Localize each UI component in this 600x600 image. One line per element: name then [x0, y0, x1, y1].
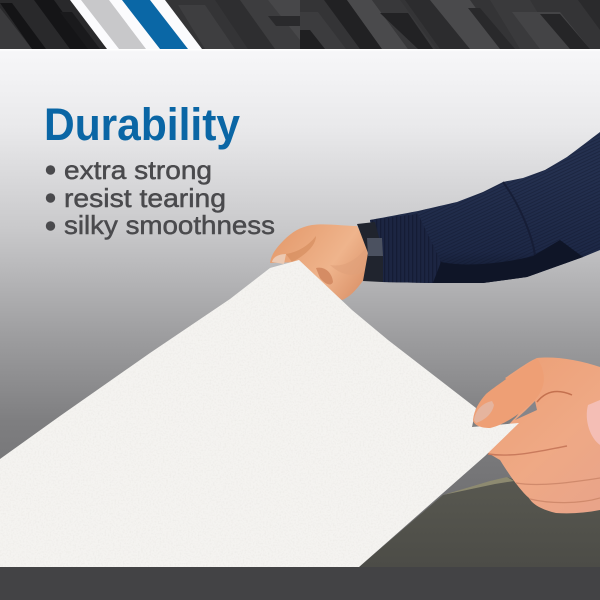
right hand palm and fingers — [486, 357, 600, 513]
diagonal brand stripes — [70, 0, 202, 49]
paper sheet — [0, 260, 519, 567]
bullet list: silky smoothness — [64, 210, 275, 240]
bullet list: extra strong — [64, 155, 212, 185]
left hand — [270, 224, 368, 300]
bullet list — [46, 155, 275, 240]
watch highlight — [367, 238, 383, 256]
bullet list: resist tearing — [64, 183, 226, 213]
wristwatch — [357, 222, 383, 282]
gap between thumb and finger — [515, 401, 537, 420]
top patterned band — [0, 0, 600, 50]
bottom bar — [0, 567, 600, 600]
right thumb — [473, 358, 544, 428]
arm with sweater sleeve — [370, 132, 600, 283]
heading: Durability — [44, 99, 240, 150]
dark mat surface — [359, 477, 600, 567]
